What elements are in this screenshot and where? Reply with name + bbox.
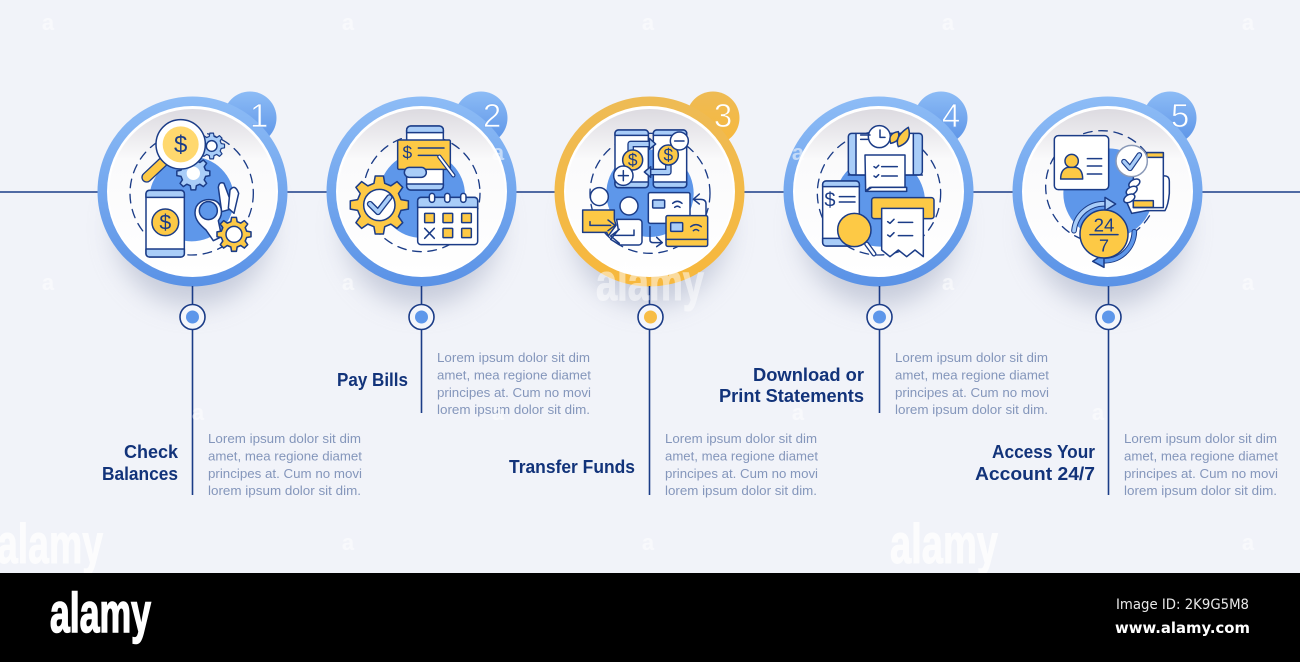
circle badge 5 [1012, 92, 1202, 306]
image id: Image ID: 2K9G5M8 [1116, 597, 1249, 613]
stock watermarks: a [342, 530, 355, 555]
text block 1: lorem ipsum dolor sit dim. [208, 483, 361, 498]
text block 2: lorem ipsum dolor sit dim. [437, 402, 590, 417]
text block 1: Lorem ipsum dolor sit dim [208, 431, 361, 446]
heading: check balances: Balances [102, 463, 178, 484]
icon: fund transfer: $ [628, 150, 638, 170]
stock watermarks: a [1242, 270, 1255, 295]
icon: 24/7 account access: 7 [1099, 235, 1109, 255]
stock watermarks: a [492, 140, 505, 165]
step 5: access your account 24/7 [975, 92, 1278, 498]
stock watermarks: a [642, 10, 655, 35]
text block 3: principes at. Cum no movi [665, 466, 818, 481]
text block 5: amet, mea regione diamet [1124, 448, 1278, 464]
text block 4: Lorem ipsum dolor sit dim [895, 350, 1048, 365]
circle badge 2: 2 [483, 97, 501, 134]
text block 1: principes at. Cum no movi [208, 466, 362, 481]
stock watermarks: a [42, 10, 55, 35]
connector and node 5 [1096, 286, 1121, 495]
circle badge 5: 5 [1171, 97, 1189, 134]
heading: transfer funds: Transfer Funds [509, 456, 635, 477]
heading: download or print statements: Download or [753, 364, 864, 385]
text block 3: amet, mea regione diamet [665, 448, 818, 464]
icon: printed statements: $ [824, 190, 836, 212]
text block 1 [208, 431, 362, 498]
step 4: download or print statements [719, 92, 1049, 417]
horizontal timeline [0, 191, 1300, 193]
heading: access your account 24/7: Account 24/7 [975, 463, 1095, 484]
text block 2: principes at. Cum no movi [437, 385, 591, 400]
step 3: transfer funds [509, 92, 818, 498]
circle badge 2 [326, 92, 516, 306]
text block 5: lorem ipsum dolor sit dim. [1124, 483, 1277, 498]
icon: fund transfer [583, 130, 710, 253]
footer logo: alamy [50, 581, 151, 644]
stock watermarks: a [342, 10, 355, 35]
icon: bill payment [350, 126, 480, 252]
step 2: pay bills [326, 92, 591, 417]
connector and node 4 [867, 286, 892, 413]
heading: pay bills: Pay Bills [337, 369, 408, 390]
text block 3 [665, 431, 818, 498]
stock watermarks: a [942, 10, 955, 35]
connector and node 2 [409, 286, 434, 413]
heading: access your account 24/7: Access Your [992, 441, 1095, 462]
stock watermarks: a [42, 270, 55, 295]
circle badge 1 [98, 92, 288, 306]
stock watermarks: a [942, 270, 955, 295]
icon: 24/7 account access [1046, 131, 1169, 267]
heading: access your account 24/7 [975, 441, 1095, 484]
heading: download or print statements [719, 364, 864, 406]
connector and node 1 [180, 286, 205, 495]
text block 2: Lorem ipsum dolor sit dim [437, 350, 590, 365]
heading: download or print statements: Print Statements [719, 385, 864, 406]
circle badge 1: 1 [250, 97, 268, 134]
text block 3: lorem ipsum dolor sit dim. [665, 483, 817, 498]
icon: 24/7 account access: 24 [1094, 215, 1114, 236]
text block 5 [1124, 431, 1278, 498]
footer bar [0, 573, 1300, 662]
circle badge 3: 3 [714, 97, 732, 134]
step 1: check balances [98, 92, 362, 498]
stock watermarks: alamy [0, 512, 103, 575]
text block 5: principes at. Cum no movi [1124, 466, 1278, 481]
stock watermarks: a [792, 400, 805, 425]
text block 3: Lorem ipsum dolor sit dim [665, 431, 817, 446]
stock watermarks: a [792, 140, 805, 165]
connector and node 3 [638, 286, 663, 495]
icon: bill payment: $ [403, 143, 413, 163]
stock watermarks: a [342, 270, 355, 295]
text block 4 [895, 350, 1049, 417]
text block 4: amet, mea regione diamet [895, 368, 1049, 382]
circle badge 4: 4 [942, 97, 960, 134]
footer url: www.alamy.com [1115, 619, 1250, 637]
circle badge 3 [554, 92, 744, 306]
stock watermarks: alamy [890, 512, 998, 575]
icon: fund transfer: $ [664, 145, 674, 165]
stock watermarks: a [492, 400, 505, 425]
heading: check balances [102, 441, 179, 484]
text block 5: Lorem ipsum dolor sit dim [1124, 431, 1277, 446]
stock watermarks: a [192, 400, 205, 425]
stock watermarks: a [1242, 530, 1255, 555]
text block 4: lorem ipsum dolor sit dim. [895, 402, 1048, 417]
text block 1: amet, mea regione diamet [208, 448, 362, 464]
text block 2: amet, mea regione diamet [437, 368, 591, 382]
icon: balance check on phone: $ [159, 211, 171, 235]
circle badge 4 [784, 92, 974, 306]
stock watermarks: alamy [596, 254, 704, 312]
stock watermarks: a [1092, 400, 1105, 425]
icon: balance check on phone: $ [174, 131, 187, 158]
stock watermarks: a [642, 530, 655, 555]
icon: balance check on phone [130, 120, 253, 257]
text block 4: principes at. Cum no movi [895, 385, 1049, 400]
text block 2 [437, 350, 591, 417]
heading: check balances: Check [124, 441, 179, 462]
stock watermarks: a [1242, 10, 1255, 35]
icon: printed statements [817, 126, 941, 257]
